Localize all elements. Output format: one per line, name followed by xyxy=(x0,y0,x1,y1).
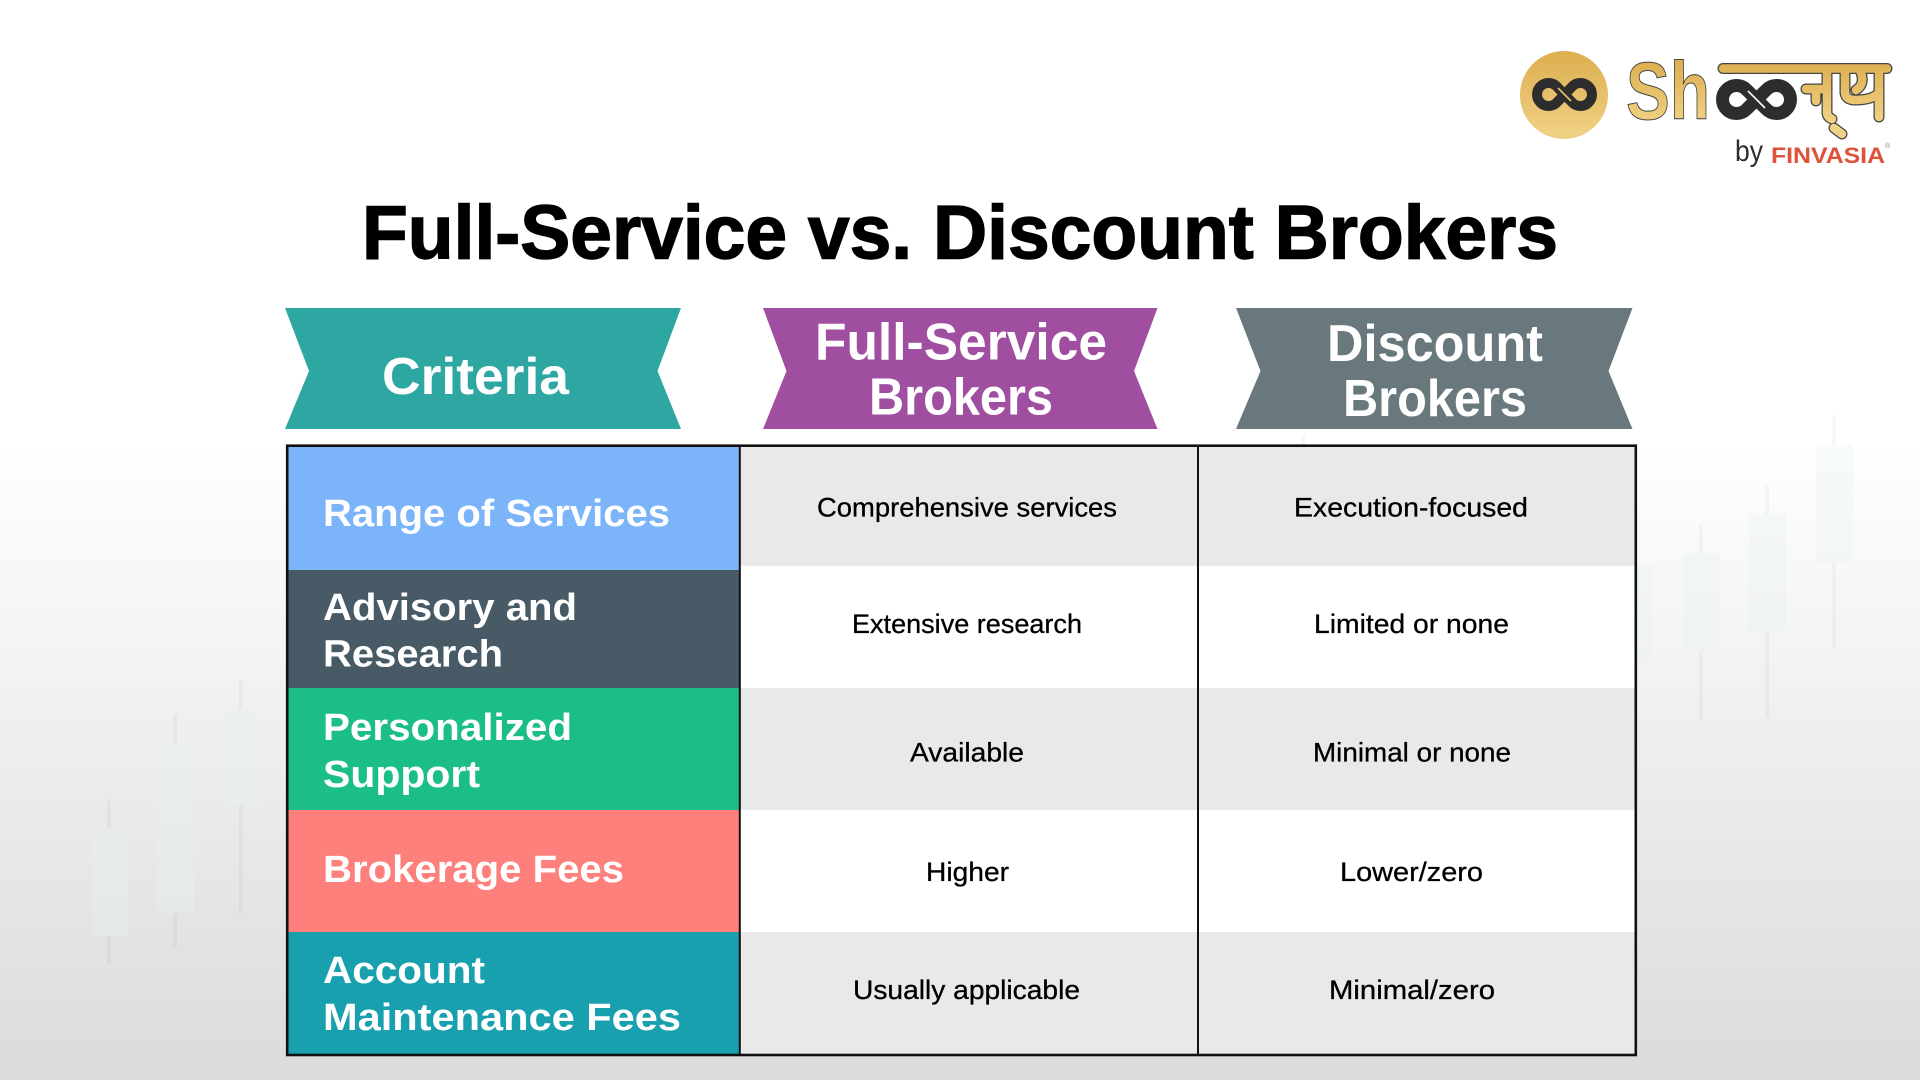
full-service column values xyxy=(817,492,1117,1005)
row label: Personalized Support xyxy=(287,688,739,810)
icon: wordmark infinity xyxy=(1723,86,1790,114)
logo text: registered mark: ® xyxy=(1885,142,1891,150)
discount column values: Lower/zero xyxy=(1340,857,1483,887)
discount column values xyxy=(1294,492,1528,1005)
discount column values: Minimal/zero xyxy=(1329,975,1495,1005)
logo text: finvasia: FINVASIA xyxy=(1771,143,1885,168)
table row stripes xyxy=(739,445,1636,1055)
column header ribbon: Full-Service Brokers xyxy=(763,308,1158,429)
full-service column values: Comprehensive services xyxy=(817,492,1117,522)
logo: Shoonya by Finvasia xyxy=(1520,46,1891,168)
comparison table xyxy=(287,445,1636,1055)
full-service column values: Usually applicable xyxy=(853,975,1080,1005)
row label: Account Maintenance Fees xyxy=(287,932,739,1055)
row label: Personalized Support: Personalized xyxy=(323,707,572,749)
row label: Advisory and Research: Research xyxy=(323,634,503,676)
full-service column values: Extensive research xyxy=(852,609,1082,639)
full-service column values: Higher xyxy=(926,857,1009,887)
candlestick chart: right background xyxy=(1301,415,1853,721)
full-service column values: Available xyxy=(910,738,1024,768)
discount column values: Execution-focused xyxy=(1294,492,1528,522)
column header ribbon: Criteria xyxy=(285,308,681,429)
row label: Range of Services: Range of Services xyxy=(323,493,670,535)
row label: Brokerage Fees: Brokerage Fees xyxy=(323,849,624,891)
row label: Account Maintenance Fees: Account xyxy=(323,950,485,992)
discount column values: Limited or none xyxy=(1314,609,1509,639)
discount column values: Minimal or none xyxy=(1313,738,1511,768)
column header ribbon: Discount Brokers: Discount xyxy=(1327,315,1543,373)
column header ribbon: Criteria: Criteria xyxy=(382,348,570,406)
row label: Brokerage Fees xyxy=(287,810,739,932)
logo text: by: by xyxy=(1735,135,1763,168)
row label: Account Maintenance Fees: Maintenance Fees xyxy=(323,997,681,1039)
row label: Personalized Support: Support xyxy=(323,754,480,796)
column header ribbon: Discount Brokers: Brokers xyxy=(1343,370,1527,428)
icon: gold circle with infinity xyxy=(1520,51,1608,139)
candlestick chart: left background xyxy=(91,680,260,964)
logo mark: gold wordmark strokes xyxy=(1723,68,1887,134)
title: Full-Service vs. Discount Brokers xyxy=(362,190,1558,276)
column header ribbon: Full-Service Brokers: Brokers xyxy=(869,368,1053,426)
column header ribbon: Discount Brokers xyxy=(1236,308,1632,429)
row label: Advisory and Research xyxy=(287,570,739,688)
row label: Range of Services xyxy=(287,445,739,570)
row label: Advisory and Research: Advisory and xyxy=(323,587,577,629)
logo wordmark: Sh: Sh xyxy=(1626,46,1710,137)
column header ribbon: Full-Service Brokers: Full-Service xyxy=(815,314,1107,372)
